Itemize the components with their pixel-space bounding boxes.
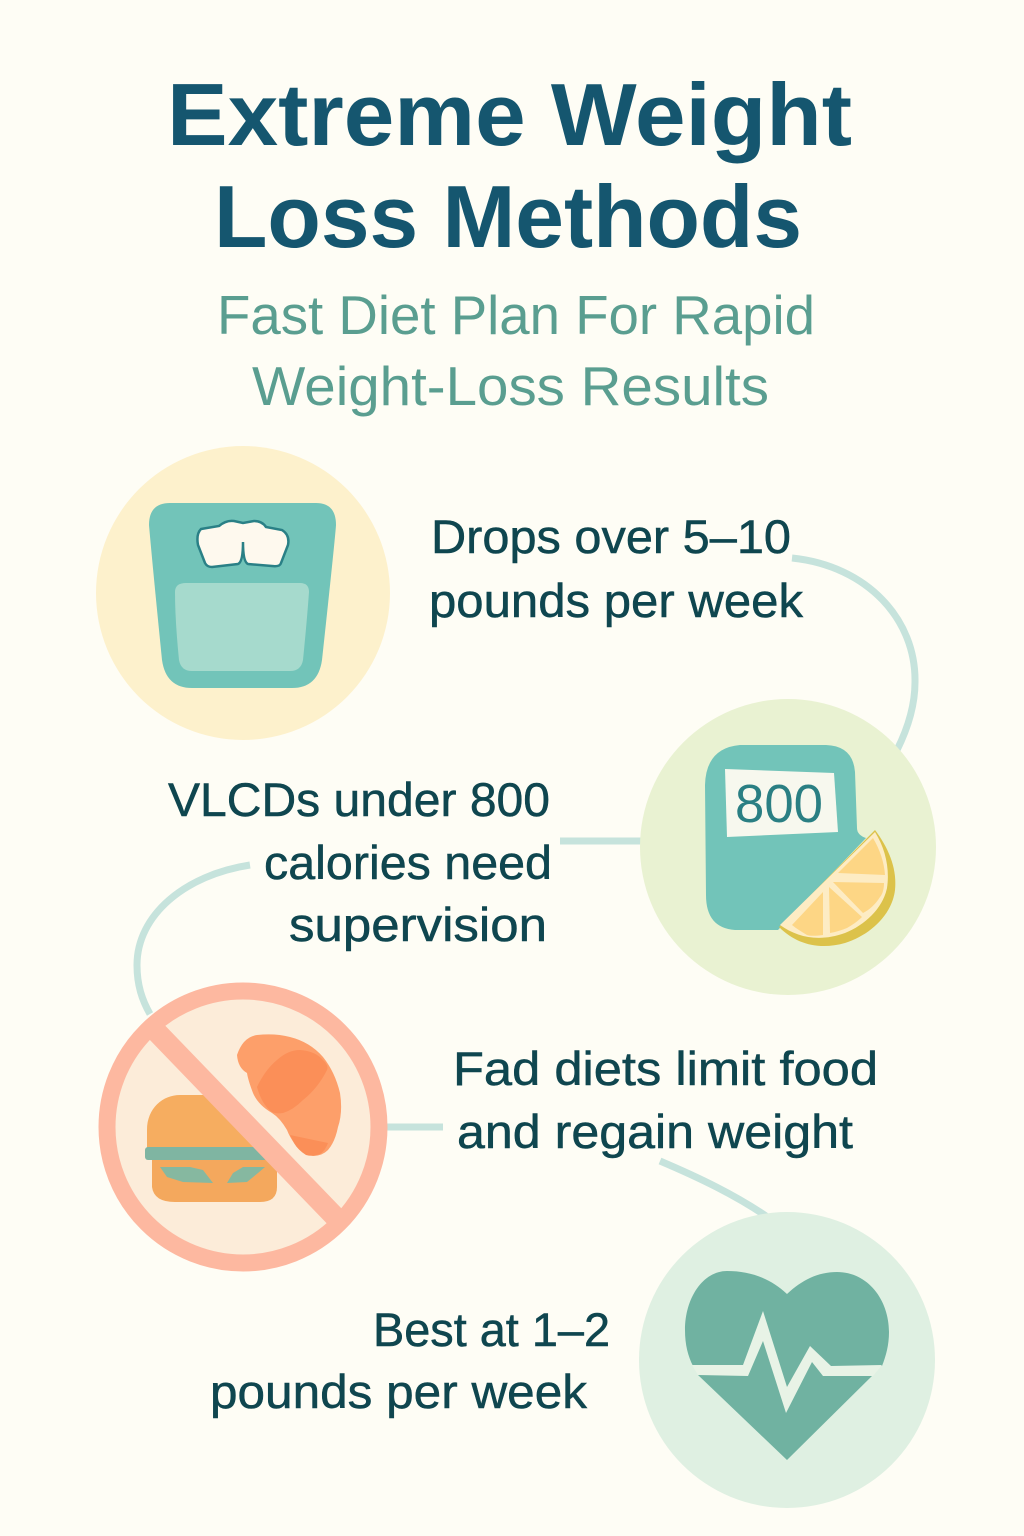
subtitle: Weight-Loss Results: [252, 355, 769, 417]
subtitle: [217, 284, 815, 417]
icon: heart with pulse: [639, 1212, 935, 1508]
text: best at: pounds per week: [210, 1365, 588, 1418]
title: Loss Methods: [214, 167, 802, 266]
title: Extreme Weight: [167, 65, 852, 164]
connector: text to no-food sign: [137, 865, 250, 1014]
connector: scale to calorie counter: [792, 558, 915, 750]
text: VLCDs: [168, 773, 552, 951]
text: VLCDs: supervision: [289, 898, 547, 951]
text: drops over: [429, 510, 804, 627]
subtitle: Fast Diet Plan For Rapid: [217, 284, 815, 346]
icon: bathroom scale: [96, 446, 390, 740]
text: drops over: pounds per week: [429, 574, 804, 627]
text: VLCDs: calories need: [264, 836, 552, 889]
icon: calorie counter with lemon: 800: [735, 774, 823, 834]
croissant: [237, 1034, 341, 1156]
text: fad diets: Fad diets limit food: [453, 1042, 878, 1095]
connector: calorie counter to text: [560, 838, 642, 844]
icon: calorie counter with lemon: [640, 699, 936, 995]
connector: text to heart: [660, 1161, 766, 1216]
icon: no fast food sign: [107, 991, 379, 1263]
text: VLCDs: VLCDs under 800: [168, 773, 550, 826]
connector: no-food sign to text: [386, 1124, 443, 1130]
text: fad diets: [453, 1042, 878, 1158]
burger: [145, 1095, 277, 1202]
text: best at: [210, 1303, 610, 1418]
title: [167, 65, 852, 266]
text: fad diets: and regain weight: [457, 1105, 853, 1158]
text: best at: Best at 1–2: [373, 1303, 610, 1356]
text: drops over: Drops over 5–10: [431, 510, 791, 563]
